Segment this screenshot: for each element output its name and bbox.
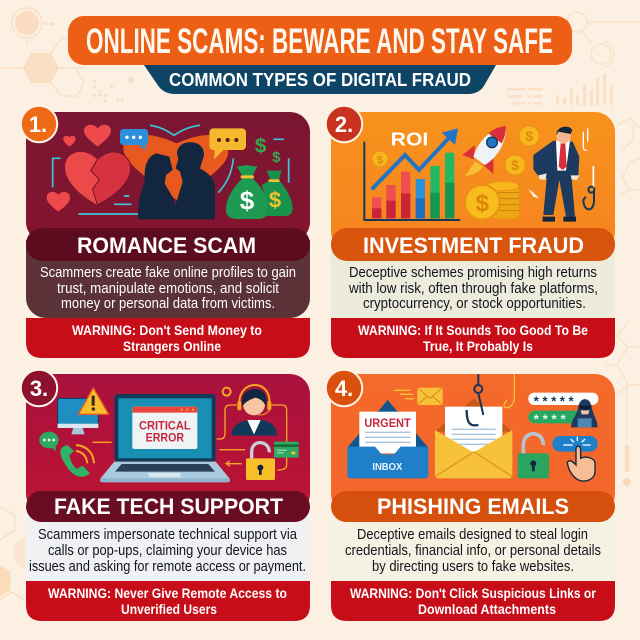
illustration: laptop error, phone call and support agent: CRITICAL bbox=[139, 418, 191, 432]
panel: fake tech support bbox=[26, 374, 310, 621]
description bbox=[29, 527, 306, 575]
warning box: True, It Probably Is bbox=[423, 339, 533, 354]
warning box: Unverified Users bbox=[121, 602, 217, 617]
description: issues and asking for remote access or payment. bbox=[29, 559, 306, 575]
illustration: laptop error, phone call and support agent bbox=[39, 385, 299, 482]
badge 1: 1. bbox=[29, 112, 47, 137]
illustration: broken heart, couple and money bags: $ bbox=[255, 135, 267, 158]
description: calls or pop-ups, claiming your device has bbox=[48, 543, 287, 559]
illustration: broken heart, couple and money bags: $ bbox=[269, 187, 281, 212]
warning box: Download Attachments bbox=[418, 602, 556, 617]
warning box bbox=[331, 318, 615, 358]
description bbox=[40, 265, 296, 312]
badge 3 bbox=[21, 370, 57, 406]
illustration: inbox, hooked envelope, passwords and hacker: INBOX bbox=[372, 462, 403, 473]
description bbox=[345, 527, 601, 575]
badge 1 bbox=[21, 106, 57, 142]
illustration: broken heart, couple and money bags bbox=[47, 125, 293, 219]
illustration: laptop error, phone call and support agent: ERROR bbox=[146, 431, 184, 445]
badge 4 bbox=[326, 370, 362, 406]
heading: INVESTMENT FRAUD bbox=[363, 233, 584, 258]
panel: investment fraud bbox=[331, 112, 615, 358]
description: by directing users to fake websites. bbox=[372, 559, 574, 575]
subtitle ribbon: COMMON TYPES OF DIGITAL FRAUD bbox=[169, 69, 471, 90]
description: cryptocurrency, or stock opportunities. bbox=[363, 296, 586, 312]
title bar bbox=[26, 491, 310, 522]
heading: FAKE TECH SUPPORT bbox=[54, 494, 283, 519]
warning box bbox=[26, 318, 310, 358]
description: with low risk, often through fake platforms, bbox=[348, 281, 598, 297]
warning box bbox=[26, 581, 310, 621]
subtitle ribbon bbox=[144, 65, 496, 94]
illustration: growth chart, rocket, coins and broke investor: ROI bbox=[391, 129, 428, 150]
panel: phishing emails bbox=[331, 374, 615, 621]
illustration: inbox, hooked envelope, passwords and hacker bbox=[347, 374, 598, 481]
illustration: inbox, hooked envelope, passwords and hacker: URGENT bbox=[364, 416, 411, 430]
warning box: WARNING: Don't Send Money to bbox=[72, 323, 262, 338]
description: Scammers impersonate technical support via bbox=[38, 527, 298, 543]
warning box: WARNING: Don't Click Suspicious Links or bbox=[350, 586, 597, 601]
description: trust, manipulate emotions, and solicit bbox=[57, 281, 279, 297]
illustration: growth chart, rocket, coins and broke investor: $ bbox=[525, 128, 533, 144]
panel: romance scam bbox=[26, 112, 310, 358]
warning box: Strangers Online bbox=[123, 339, 221, 354]
description: Deceptive emails designed to steal login bbox=[357, 527, 588, 543]
badge 2 bbox=[326, 106, 362, 142]
illustration: inbox, hooked envelope, passwords and hacker: ***** bbox=[534, 394, 574, 409]
badge 2: 2. bbox=[335, 112, 353, 137]
illustration: growth chart, rocket, coins and broke investor: $ bbox=[511, 157, 519, 173]
badge 3: 3. bbox=[30, 376, 48, 401]
description bbox=[348, 265, 598, 312]
description: credentials, financial info, or personal details bbox=[345, 543, 601, 559]
illustration: inbox, hooked envelope, passwords and hacker: **** bbox=[534, 412, 566, 427]
heading: ROMANCE SCAM bbox=[77, 233, 256, 258]
illustration: growth chart, rocket, coins and broke investor bbox=[364, 126, 594, 222]
warning box bbox=[331, 581, 615, 621]
title bar bbox=[331, 228, 615, 261]
heading: PHISHING EMAILS bbox=[377, 494, 569, 519]
description: Deceptive schemes promising high returns bbox=[349, 265, 597, 281]
description: Scammers create fake online profiles to gain bbox=[40, 265, 296, 281]
description: money or personal data from victims. bbox=[61, 296, 275, 312]
illustration: broken heart, couple and money bags: $ bbox=[272, 150, 280, 166]
badge 4: 4. bbox=[335, 376, 353, 401]
illustration: growth chart, rocket, coins and broke investor: $ bbox=[377, 154, 384, 166]
illustration: broken heart, couple and money bags: $ bbox=[240, 185, 255, 215]
title bar bbox=[26, 228, 310, 261]
title bar bbox=[331, 491, 615, 522]
warning box: WARNING: Never Give Remote Access to bbox=[48, 586, 287, 601]
illustration: growth chart, rocket, coins and broke investor: $ bbox=[476, 190, 489, 217]
warning box: WARNING: If It Sounds Too Good To Be bbox=[358, 323, 588, 338]
